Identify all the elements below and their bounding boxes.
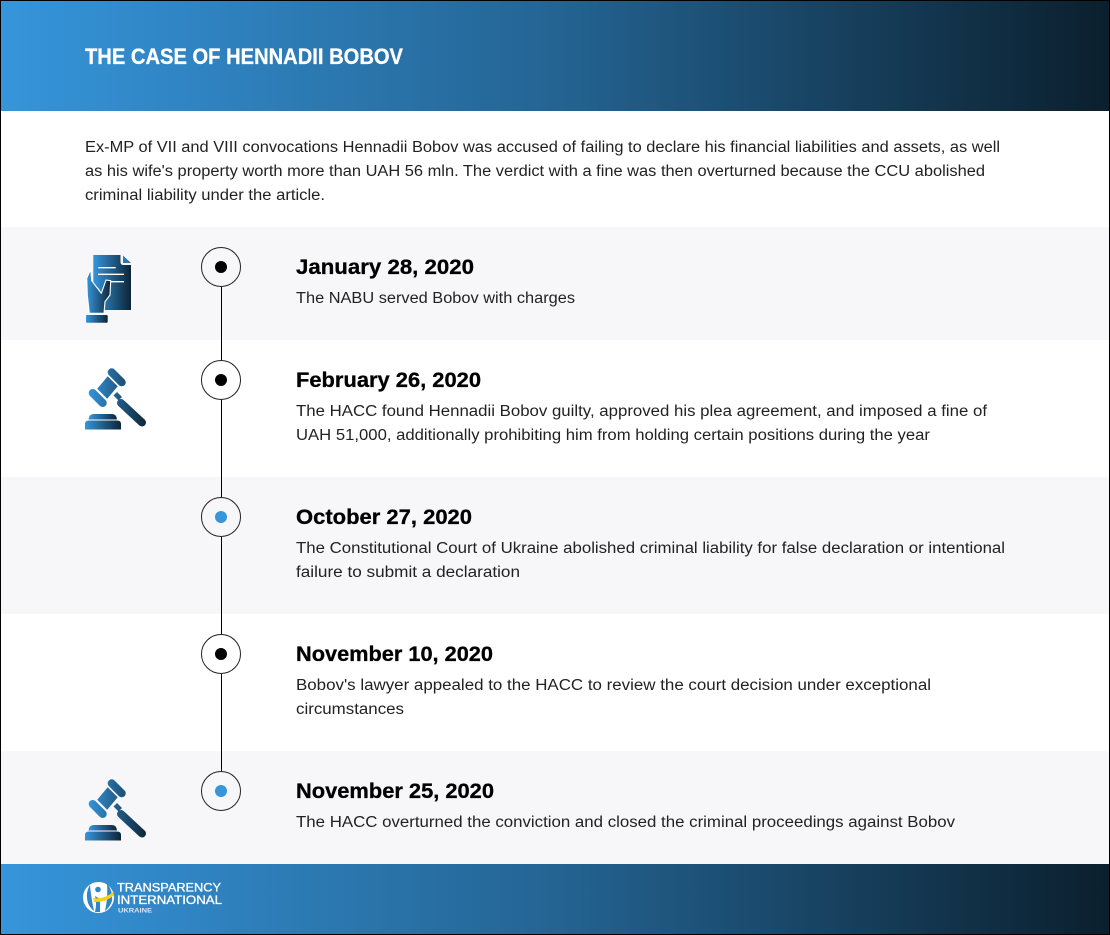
row background: October 27 [0, 477, 1110, 614]
row background: January 28 [0, 227, 1110, 340]
row background: November 25 [0, 751, 1110, 864]
icon: hand holding document [86, 255, 131, 323]
event: February 26, 2020: The HACC found Hennadii Bobov guilty, approved his plea agreement, and imposed a fine of [296, 403, 988, 420]
logo: Transparency International Ukraine: INTERNATIONAL [117, 893, 222, 907]
event: October 27, 2020: The Constitutional Court of Ukraine abolished criminal liability for false declaration or intentional [296, 540, 1005, 557]
event: October 27, 2020: October 27, 2020 [296, 506, 472, 529]
event: November 10, 2020: Bobov's lawyer appealed to the HACC to review the court decision under exceptional [296, 677, 931, 694]
icon: gavel (verdict overturned) [85, 783, 142, 840]
event: November 25, 2020: The HACC overturned the conviction and closed the criminal proceedings against Bobov [296, 814, 955, 831]
event: November 25, 2020 [296, 780, 955, 831]
logo: Transparency International Ukraine [83, 881, 222, 914]
timeline marker: November 10 [202, 634, 240, 674]
intro text: Ex-MP of VII and VIII convocations Hennadii Bobov was accused of failing to declare his financial liabilities and assets, as well [85, 139, 1000, 156]
timeline marker: February 26 [202, 360, 240, 400]
event: January 28, 2020: January 28, 2020 [296, 256, 474, 279]
event: November 10, 2020 [296, 643, 931, 718]
logo: Transparency International Ukraine: UKRAINE [118, 908, 153, 914]
logo: Transparency International Ukraine: TRANSPARENCY [117, 881, 221, 895]
event: February 26, 2020: February 26, 2020 [296, 369, 481, 392]
intro text: criminal liability under the article. [85, 187, 325, 204]
intro text [85, 139, 1000, 204]
event: January 28, 2020: The NABU served Bobov with charges [296, 290, 575, 307]
title: THE CASE OF HENNADII BOBOV [85, 44, 403, 69]
timeline marker: January 28 [202, 248, 240, 286]
event: January 28, 2020 [296, 256, 575, 307]
event: November 25, 2020: November 25, 2020 [296, 780, 494, 803]
header banner [0, 0, 1110, 111]
icon: gavel [85, 372, 142, 430]
event: November 10, 2020: November 10, 2020 [296, 643, 493, 666]
event: October 27, 2020: failure to submit a declaration [296, 564, 520, 581]
timeline marker: October 27 [202, 498, 240, 536]
event: February 26, 2020 [296, 369, 988, 444]
timeline line [221, 267, 222, 791]
event: November 10, 2020: circumstances [296, 701, 404, 718]
timeline marker: November 25 [202, 772, 240, 810]
event: February 26, 2020: UAH 51,000, additionally prohibiting him from holding certain positions during the year [296, 427, 930, 444]
footer banner [0, 864, 1110, 934]
event: October 27, 2020 [296, 506, 1005, 581]
intro text: as his wife's property worth more than UAH 56 mln. The verdict with a fine was then overturned because the CCU abolished [85, 163, 985, 180]
